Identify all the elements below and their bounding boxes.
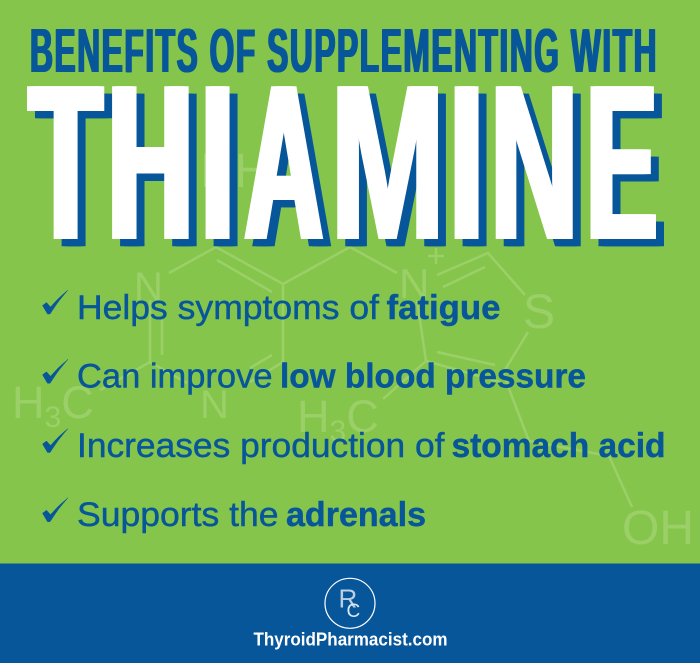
molecule watermark: 3 xyxy=(44,401,61,434)
benefit 3: stomach acid: stomach acid xyxy=(452,427,666,465)
title: thiamine xyxy=(27,38,664,286)
website address: ThyroidPharmacist.com xyxy=(254,630,448,650)
benefit 3: stomach acid: Increases production of xyxy=(77,427,445,465)
molecule watermark: N xyxy=(200,383,229,427)
title: thiamine: N xyxy=(490,38,579,286)
molecule watermark: 3 xyxy=(330,415,346,448)
molecule watermark: OH xyxy=(622,502,694,555)
benefit 2: low blood pressure: low blood pressure xyxy=(280,358,586,396)
title: thiamine: I xyxy=(201,38,235,286)
molecule watermark: N xyxy=(134,265,163,309)
benefit 4: adrenals xyxy=(42,496,426,534)
molecule watermark: H xyxy=(297,391,330,442)
molecule watermark: NH xyxy=(200,145,269,198)
icon: RC logo: C xyxy=(346,601,360,622)
title: thiamine: E xyxy=(586,38,656,286)
benefit 1: fatigue xyxy=(42,289,500,327)
title: thiamine: H xyxy=(108,38,193,286)
benefit 3: stomach acid xyxy=(42,427,666,465)
title: thiamine: T xyxy=(29,38,102,286)
molecule watermark: N xyxy=(399,260,429,307)
benefit 4: adrenals: Supports the xyxy=(77,496,278,534)
molecule watermark: C xyxy=(346,391,379,442)
title: thiamine: A xyxy=(245,38,323,286)
title: thiamine: I xyxy=(450,38,484,286)
benefit 4: adrenals: adrenals xyxy=(286,496,426,534)
benefit 2: low blood pressure: Can improve xyxy=(77,358,272,396)
title: thiamine: M xyxy=(330,38,445,286)
benefit 1: fatigue: fatigue xyxy=(386,289,500,327)
benefit 2: low blood pressure xyxy=(42,358,586,396)
icon: RC logo xyxy=(325,578,375,628)
benefit 1: fatigue: Helps symptoms of xyxy=(77,289,380,327)
molecule watermark: H xyxy=(12,377,44,428)
icon: RC logo: R xyxy=(338,584,357,614)
molecule watermark: C xyxy=(61,377,94,428)
molecule watermark: S xyxy=(523,286,555,339)
heading: benefits of supplementing with: BENEFITS OF SUPPLEMENTING WITH xyxy=(30,17,658,86)
